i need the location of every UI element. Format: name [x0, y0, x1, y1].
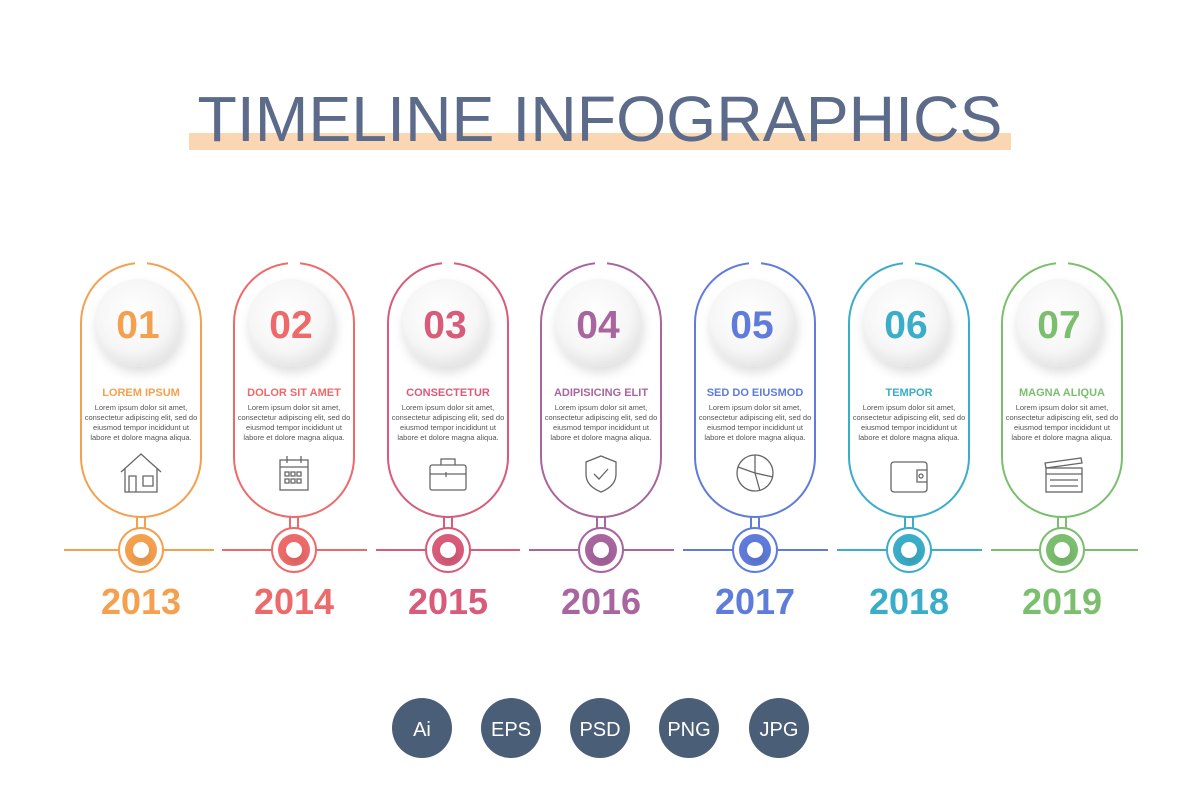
- step 6: 2018: [869, 581, 949, 622]
- step 3: 03: [423, 304, 467, 347]
- step 2: Lorem ipsum dolor sit amet,: [248, 403, 340, 412]
- format badges: Ai: [413, 719, 431, 741]
- step 7: MAGNA ALIQUA: [1019, 387, 1105, 399]
- step 2: DOLOR SIT AMET: [247, 387, 341, 399]
- step 5: [683, 258, 828, 622]
- step 2: [222, 258, 367, 622]
- step 7: Lorem ipsum dolor sit amet,: [1016, 403, 1108, 412]
- step 1: LOREM IPSUM: [102, 387, 180, 399]
- title highlight bar: [189, 133, 1011, 150]
- step 1: 01: [116, 304, 160, 347]
- step 6: labore et dolore magna aliqua.: [858, 433, 960, 442]
- step 5: labore et dolore magna aliqua.: [704, 433, 806, 442]
- step 4: 2016: [561, 581, 641, 622]
- format badges: EPS: [491, 719, 531, 741]
- step 6: Lorem ipsum dolor sit amet,: [863, 403, 955, 412]
- step 1: consectetur adipiscing elit, sed do: [85, 413, 197, 422]
- step 5: 2017: [715, 581, 795, 622]
- step 5: Lorem ipsum dolor sit amet,: [709, 403, 801, 412]
- step 5: SED DO EIUSMOD: [707, 387, 803, 399]
- step 2: labore et dolore magna aliqua.: [243, 433, 345, 442]
- step 5: 05: [730, 304, 774, 347]
- step 4: labore et dolore magna aliqua.: [550, 433, 652, 442]
- format badges: PSD: [579, 719, 621, 741]
- step 2: 02: [269, 304, 313, 347]
- step 7: labore et dolore magna aliqua.: [1011, 433, 1113, 442]
- step 7: [991, 258, 1138, 622]
- step 3: [376, 258, 520, 622]
- format badges: JPG: [760, 719, 798, 741]
- step 6: 06: [884, 304, 928, 347]
- step 1: 2013: [101, 581, 181, 622]
- step 7: eiusmod tempor incididunt ut: [1014, 423, 1111, 432]
- step 1: Lorem ipsum dolor sit amet,: [95, 403, 187, 412]
- step 4: Lorem ipsum dolor sit amet,: [555, 403, 647, 412]
- step 4: eiusmod tempor incididunt ut: [553, 423, 650, 432]
- step 7: 07: [1037, 304, 1081, 347]
- step 4: consectetur adipiscing elit, sed do: [545, 413, 657, 422]
- format badges: PNG: [667, 719, 711, 741]
- step 7: consectetur adipiscing elit, sed do: [1006, 413, 1118, 422]
- step 6: [837, 258, 982, 622]
- step 4: [529, 258, 674, 622]
- step 3: 2015: [408, 581, 488, 622]
- step 5: consectetur adipiscing elit, sed do: [699, 413, 811, 422]
- step 3: Lorem ipsum dolor sit amet,: [402, 403, 494, 412]
- step 4: ADIPISICING ELIT: [554, 387, 648, 399]
- step 6: consectetur adipiscing elit, sed do: [853, 413, 965, 422]
- step 3: CONSECTETUR: [406, 387, 490, 399]
- step 7: 2019: [1022, 581, 1102, 622]
- step 2: 2014: [254, 581, 334, 622]
- format badges: [392, 698, 809, 758]
- step 3: eiusmod tempor incididunt ut: [400, 423, 497, 432]
- step 3: labore et dolore magna aliqua.: [397, 433, 499, 442]
- step 6: TEMPOR: [885, 387, 933, 399]
- step 5: eiusmod tempor incididunt ut: [707, 423, 804, 432]
- step 2: consectetur adipiscing elit, sed do: [238, 413, 350, 422]
- step 1: eiusmod tempor incididunt ut: [93, 423, 190, 432]
- step 6: eiusmod tempor incididunt ut: [861, 423, 958, 432]
- step 2: eiusmod tempor incididunt ut: [246, 423, 343, 432]
- step 1: [64, 258, 214, 622]
- step 1: labore et dolore magna aliqua.: [90, 433, 192, 442]
- title: TIMELINE INFOGRAPHICS: [198, 83, 1002, 155]
- step 3: consectetur adipiscing elit, sed do: [392, 413, 504, 422]
- step 4: 04: [576, 304, 620, 347]
